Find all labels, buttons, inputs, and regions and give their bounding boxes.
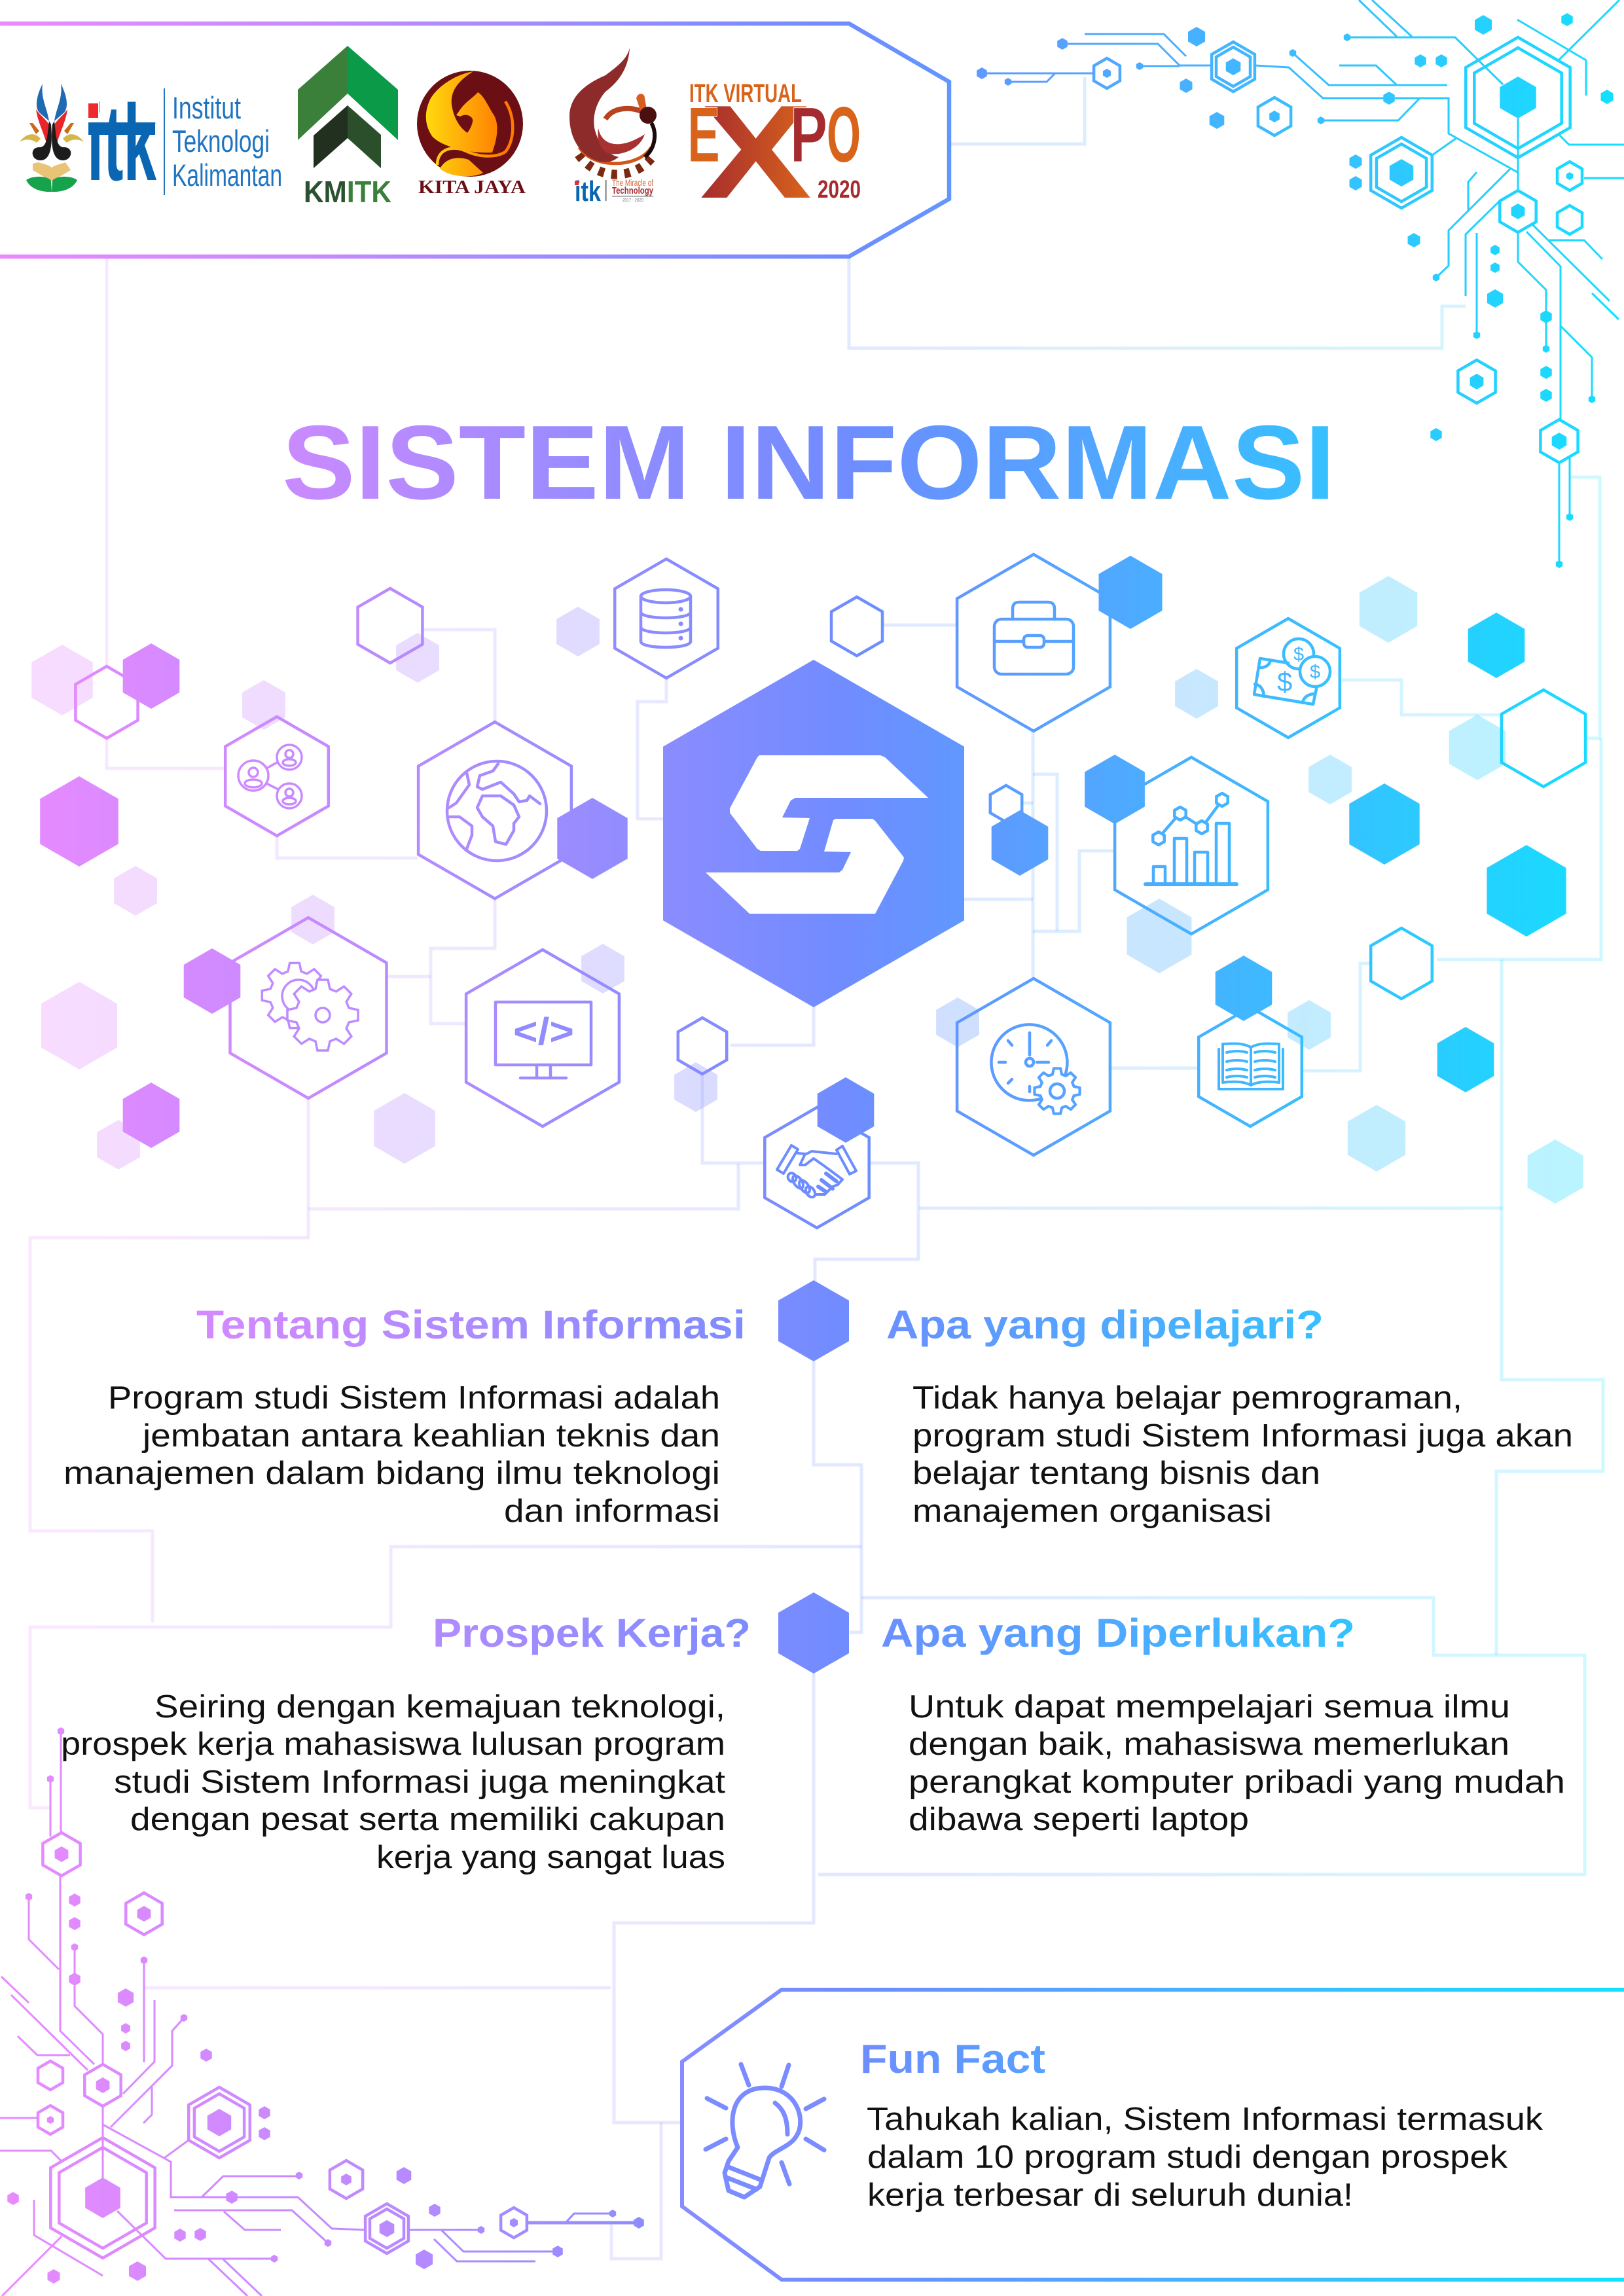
logo: Kita Jaya <box>417 71 526 198</box>
text block: dipelajari: manajemen organisasi <box>912 1494 1272 1529</box>
icon: money: $ <box>1310 662 1320 683</box>
icon: globe <box>447 761 547 861</box>
icon: briefcase <box>994 602 1074 674</box>
logo: ITK Virtual Expo 2020 <box>687 78 861 226</box>
heading: Tentang Sistem Informasi: Tentang Sistem Informasi <box>196 1302 746 1347</box>
text block: prospek: dengan pesat serta memiliki cakupan <box>130 1802 725 1837</box>
icon: gears <box>262 963 358 1050</box>
logo: ITK Virtual Expo 2020: 2020 <box>818 176 861 204</box>
section marker hexagon 2 <box>778 1592 849 1674</box>
text block: prospek: kerja yang sangat luas <box>376 1840 725 1875</box>
circuit: top right <box>977 0 1624 568</box>
text block: prospek <box>61 1689 725 1875</box>
text block: diperlukan: dengan baik, mahasiswa memerlukan <box>909 1727 1509 1762</box>
text block: tentang: jembatan antara keahlian teknis dan <box>141 1418 720 1454</box>
text block: diperlukan: Untuk dapat mempelajari semua ilmu <box>909 1689 1510 1725</box>
logo: ITK emblem <box>20 84 84 192</box>
text block: diperlukan: perangkat komputer pribadi yang mudah <box>909 1765 1565 1800</box>
text block: diperlukan: dibawa seperti laptop <box>909 1802 1249 1837</box>
logo: ITK wordmark: Teknologi <box>172 124 270 158</box>
logo: ITK wordmark: Institut <box>172 90 241 125</box>
text block: dipelajari: Tidak hanya belajar pemrograman, <box>912 1380 1462 1416</box>
logo: KMITK <box>298 46 398 209</box>
logo: The Miracle of Technology: Technology <box>612 185 653 196</box>
icon: database <box>641 590 691 647</box>
text block: prospek: prospek kerja mahasiswa lulusan program <box>61 1727 725 1762</box>
text block: tentang: Program studi Sistem Informasi adalah <box>108 1380 720 1416</box>
logo: ITK wordmark: itk <box>87 82 156 203</box>
text block: tentang <box>63 1380 720 1529</box>
central hexagon with S logo <box>663 660 964 1007</box>
heading: Apa yang Diperlukan: Apa yang Diperlukan? <box>881 1611 1355 1655</box>
hexagon outlines <box>75 554 1585 1228</box>
text block: prospek: studi Sistem Informasi juga meningkat <box>114 1765 725 1800</box>
icon: open book <box>1219 1043 1283 1089</box>
header banner frame <box>0 24 949 257</box>
logo: ITK Virtual Expo 2020: E <box>687 91 720 179</box>
logo: The Miracle of Technology <box>569 48 657 207</box>
logo: ITK wordmark: Kalimantan <box>172 158 282 192</box>
logo: ITK Virtual Expo 2020: P <box>790 91 827 179</box>
icon: money: $ <box>1293 644 1304 665</box>
text block: diperlukan <box>909 1689 1565 1837</box>
logo: KMITK: KMITK <box>304 175 391 209</box>
heading: Apa yang dipelajari: Apa yang dipelajari? <box>886 1302 1324 1347</box>
icon: money <box>1254 639 1330 704</box>
text block: tentang: manajemen dalam bidang ilmu teknologi <box>63 1456 720 1491</box>
text block: dipelajari: program studi Sistem Informasi juga akan <box>912 1418 1573 1454</box>
light background hexagons <box>31 576 1583 1204</box>
logo: The Miracle of Technology: itk <box>575 175 601 207</box>
icon: code monitor: </> <box>513 1011 574 1053</box>
heading: fun fact: Fun Fact <box>860 2037 1045 2082</box>
text block: fun fact: dalam 10 program studi dengan prospek <box>867 2140 1508 2175</box>
text block: fun fact <box>867 2102 1543 2213</box>
icon: clock with gear <box>991 1024 1080 1114</box>
solid accent hexagons <box>40 556 1566 1148</box>
logo: ITK Virtual Expo 2020: X <box>700 78 812 226</box>
icon: handshake <box>777 1145 856 1199</box>
icon: bar and line chart <box>1146 793 1236 884</box>
icon: people network <box>238 745 302 808</box>
text block: fun fact: kerja terbesar di seluruh dunia! <box>867 2178 1353 2213</box>
text block: dipelajari: belajar tentang bisnis dan <box>912 1456 1320 1491</box>
logo: The Miracle of Technology: The Miracle of <box>612 177 653 188</box>
logo: ITK wordmark <box>87 82 282 203</box>
text block: prospek: Seiring dengan kemajuan teknologi, <box>154 1689 725 1725</box>
panel: fun fact <box>682 1990 1624 2280</box>
circuit: bottom left <box>0 1727 644 2296</box>
text block: fun fact: Tahukah kalian, Sistem Informasi termasuk <box>867 2102 1543 2137</box>
icon: money: $ <box>1277 666 1292 697</box>
text block: tentang: dan informasi <box>504 1494 720 1529</box>
heading: Prospek Kerja: Prospek Kerja? <box>433 1611 751 1655</box>
logo: ITK Virtual Expo 2020: O <box>827 91 861 179</box>
text block: dipelajari <box>912 1380 1573 1529</box>
title: SISTEM INFORMASI <box>282 404 1335 522</box>
icon: light bulb <box>706 2064 824 2197</box>
icon: code monitor <box>496 1002 591 1078</box>
logo: ITK Virtual Expo 2020: ITK VIRTUAL <box>689 79 802 108</box>
logo: The Miracle of Technology: 2017 - 2020 <box>623 198 643 203</box>
logo: Kita Jaya: KITA JAYA <box>418 177 526 198</box>
section marker hexagon 1 <box>778 1280 849 1361</box>
